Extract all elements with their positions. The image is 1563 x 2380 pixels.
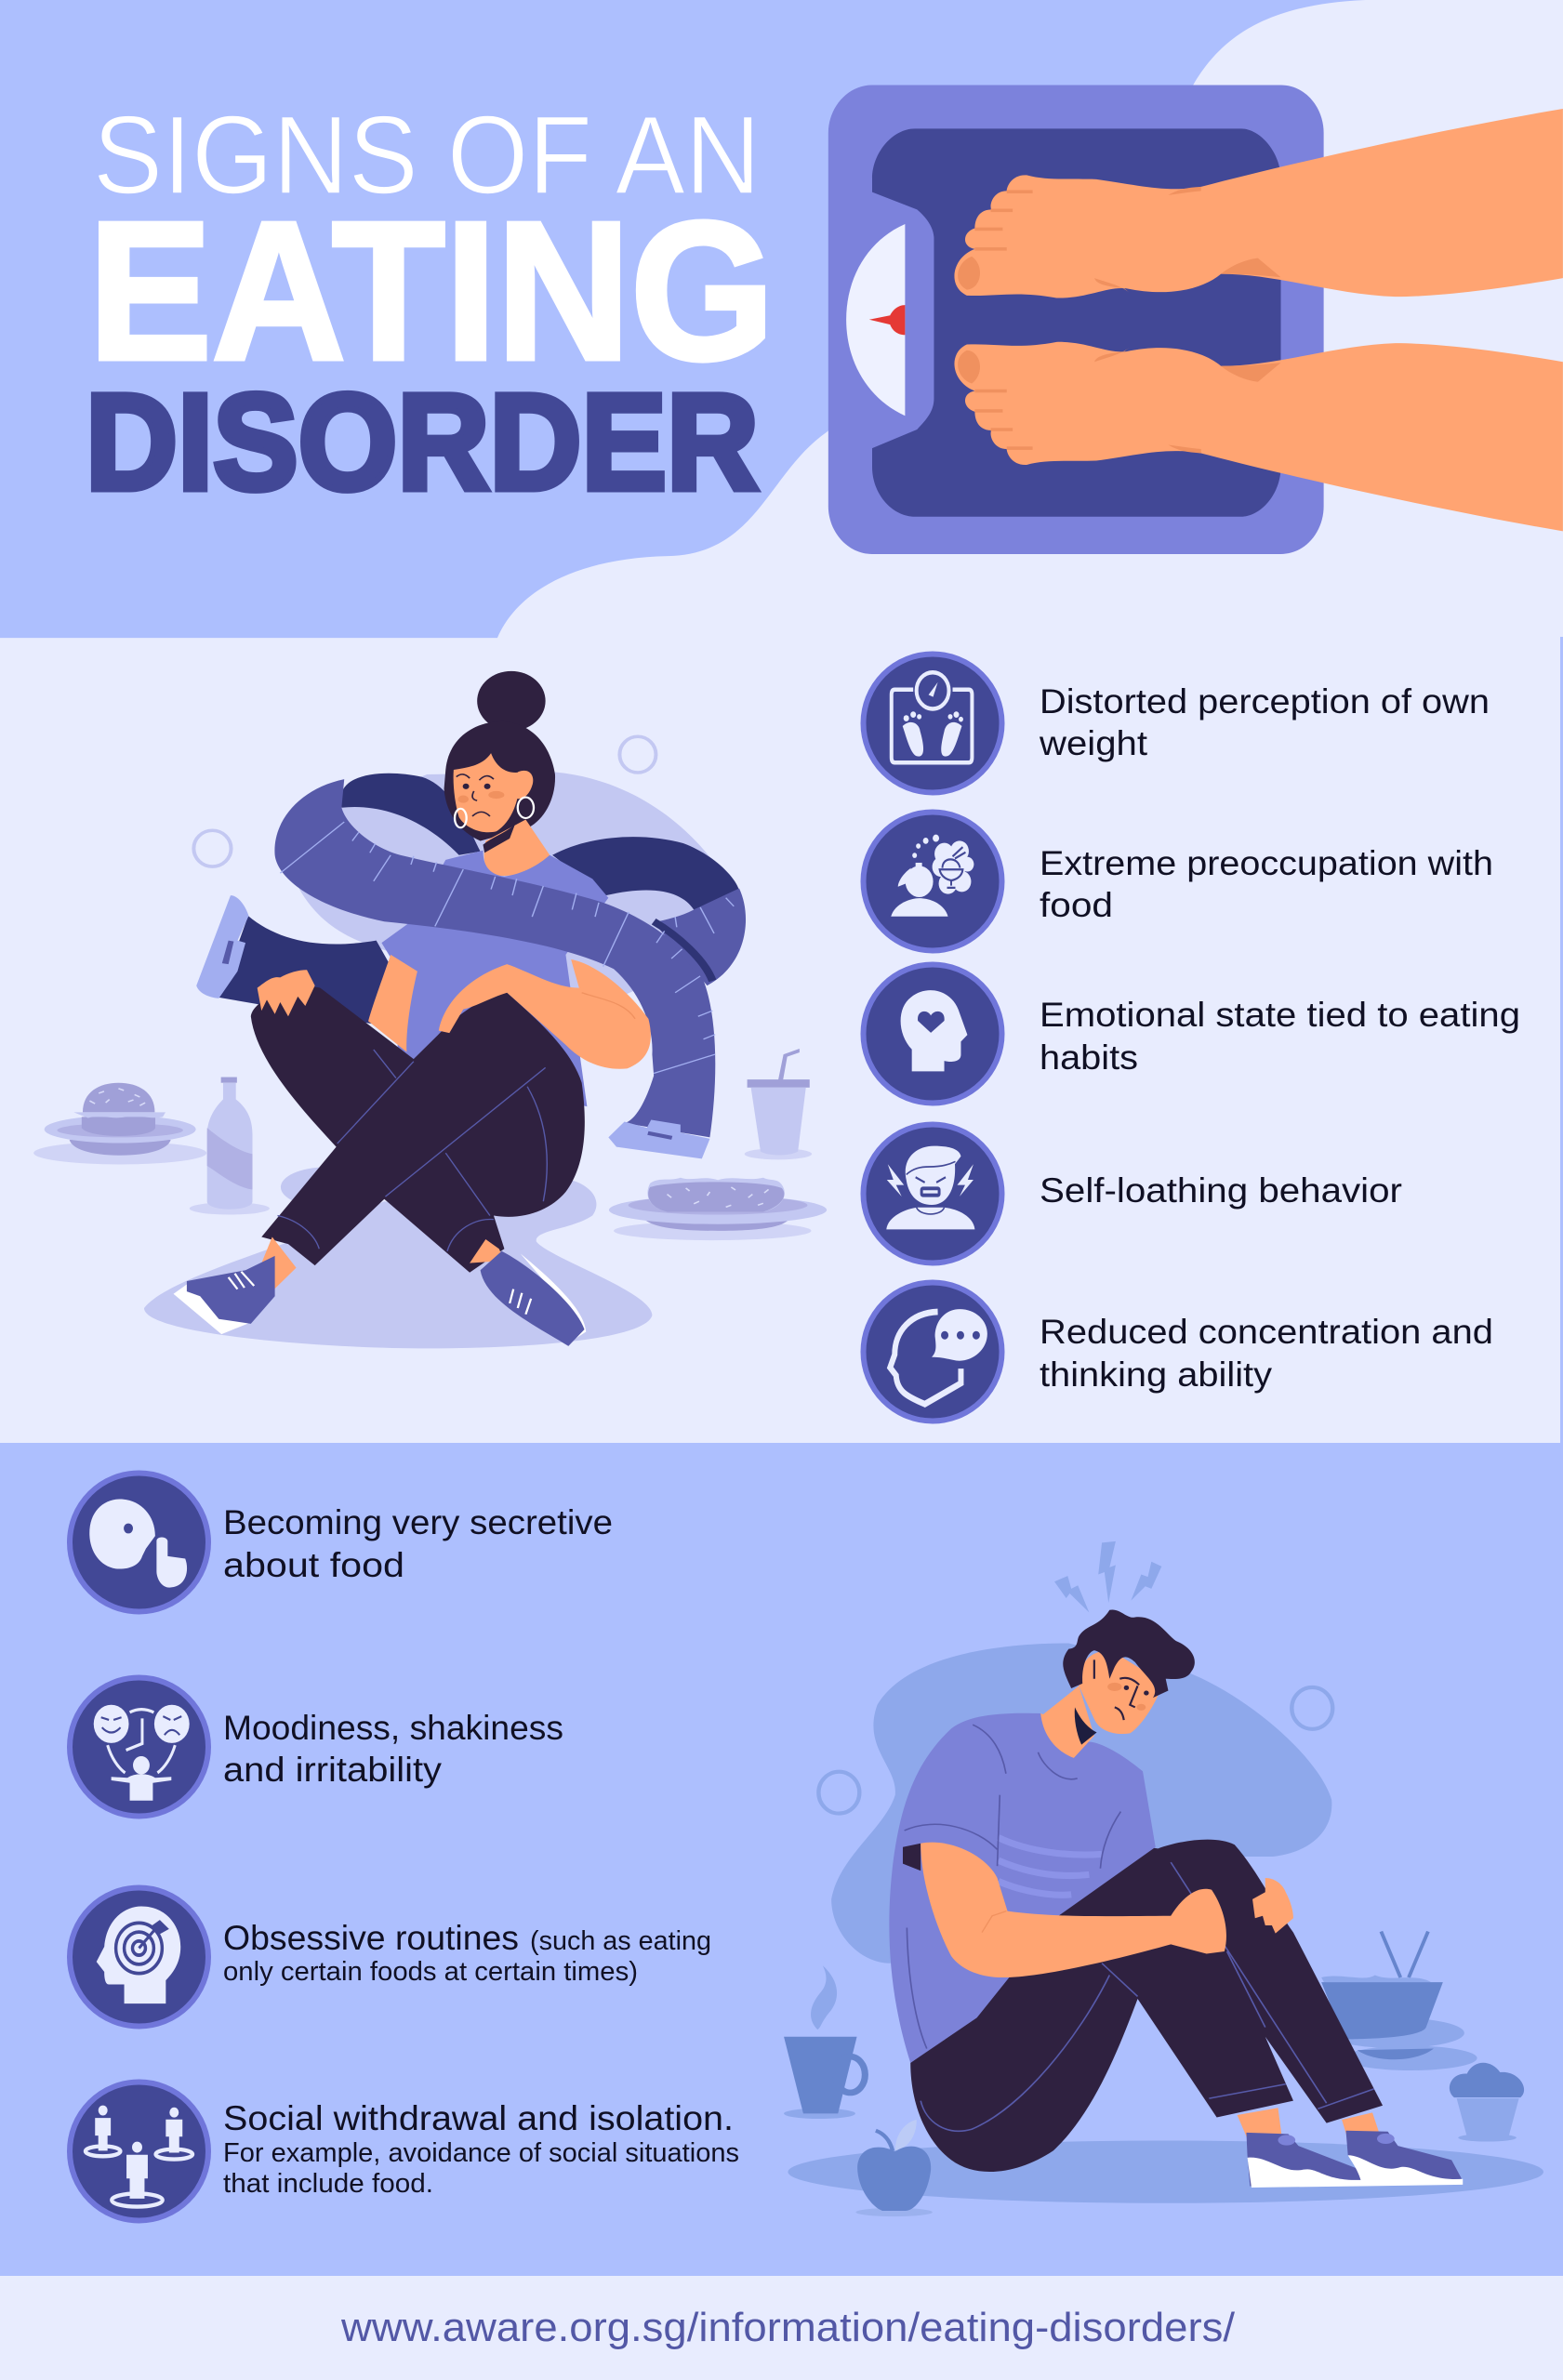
- item: distorted perception of weight: [863, 654, 1490, 792]
- text: moodiness: Moodiness, shakiness: [223, 1709, 563, 1747]
- muffin: [1450, 2063, 1524, 2142]
- floor shadow: [788, 2140, 1543, 2203]
- item: obsessive routines: only certain foods at certain times): [223, 1957, 638, 1987]
- drink cup: [745, 1049, 812, 1159]
- woman shirt: [381, 851, 608, 1106]
- far hand: [1252, 1878, 1293, 1934]
- background blob: [831, 1644, 1331, 1964]
- trouser seams: [277, 1050, 547, 1251]
- text: social withdrawal: Social withdrawal and isolation.: [223, 2099, 734, 2137]
- neck: [1040, 1686, 1094, 1758]
- item: social withdrawal: that include food.: [223, 2169, 433, 2199]
- text: secretive: Becoming very secretive: [223, 1503, 613, 1541]
- woman neck: [484, 820, 550, 876]
- icon: face with finger on lips: [70, 1473, 208, 1612]
- woman face: [454, 753, 534, 832]
- item: self-loathing: [863, 1125, 1402, 1263]
- woman hand on knee: [258, 970, 315, 1016]
- measuring tape front band: [274, 779, 715, 1137]
- icon: angry person: [863, 1125, 1002, 1263]
- top foot: [954, 109, 1563, 298]
- tape metal end: [608, 1119, 709, 1158]
- shirt stripes: [999, 1838, 1102, 1895]
- head: [1063, 1609, 1195, 1734]
- item: emotional state: habits: [1040, 1038, 1138, 1077]
- text: obsessive routines: Obsessive routines: [223, 1919, 519, 1957]
- text: self-loathing: Self-loathing behavior: [1040, 1171, 1402, 1210]
- tape dark loop left: [341, 774, 481, 855]
- woman forearm right: [439, 959, 651, 1069]
- plate of food: [609, 1178, 827, 1240]
- text: emotional state: Emotional state tied to eating: [1040, 996, 1520, 1034]
- item: preoccupation with food: [863, 813, 1493, 950]
- signs list: upper right: [863, 654, 1520, 1421]
- lower section background: [0, 1443, 1563, 2276]
- scale body: [828, 86, 1324, 554]
- item: social withdrawal: [70, 2082, 739, 2220]
- item: moodiness: [70, 1677, 563, 1817]
- trouser seams: [921, 1862, 1374, 2131]
- woman arm left: [368, 955, 417, 1052]
- stress bolts: [1054, 1541, 1161, 1612]
- tape tick marks: [280, 822, 734, 1073]
- text: distorted perception: Distorted perception of own: [1040, 682, 1490, 721]
- icon: scale with footprints: [863, 654, 1002, 792]
- woman left shoe: [174, 1256, 275, 1334]
- shoes: [1246, 2131, 1463, 2188]
- shirt seams: [905, 1725, 1120, 2049]
- bowl and chopsticks: [1321, 1932, 1477, 2070]
- icon: head with speech bubble: [863, 1283, 1002, 1421]
- item: distorted perception of weight: weight: [1039, 724, 1148, 762]
- icon: person with moods: [70, 1677, 208, 1817]
- scale dial: [846, 224, 905, 416]
- floor shadow: [144, 1178, 652, 1348]
- icon: head with heart: [863, 965, 1002, 1103]
- text: preoccupation: Extreme preoccupation with: [1040, 844, 1493, 882]
- title line: signs of an: SIGNS OF AN: [93, 93, 761, 218]
- top foot shading: [958, 187, 1281, 293]
- icon: person thinking of ice cream: [863, 813, 1002, 950]
- item: obsessive routines: [70, 1887, 711, 2027]
- woman right shoe: [481, 1251, 586, 1346]
- bottle: [190, 1078, 270, 1215]
- item: secretive about food: about food: [223, 1546, 404, 1584]
- woman ankles: [261, 1237, 504, 1294]
- shirt: [889, 1713, 1156, 2063]
- item: secretive about food: [70, 1473, 613, 1612]
- illustration: feet on bathroom scale: [828, 86, 1563, 554]
- scale needle: [869, 305, 905, 335]
- trousers: [910, 1840, 1383, 2172]
- background blob: [298, 773, 726, 1012]
- scale platform: [872, 128, 1281, 517]
- arm: [921, 1843, 1226, 1977]
- item: social withdrawal: For example, avoidance of social situations: [223, 2138, 739, 2168]
- item: moodiness: and irritability: [223, 1751, 443, 1789]
- header background wave: [0, 0, 1366, 638]
- tape dark loop right: [552, 837, 739, 909]
- woman trousers: [251, 987, 585, 1273]
- icon: isolated people: [70, 2082, 208, 2220]
- item: reduced concentration: [863, 1283, 1493, 1421]
- item: preoccupation with food: food: [1040, 886, 1113, 924]
- burger on plate: [33, 1083, 206, 1164]
- bottom foot: [954, 342, 1563, 531]
- hair: [1063, 1609, 1195, 1698]
- title line: disorder: DISORDER: [86, 366, 759, 519]
- item: obsessive routines: (such as eating: [530, 1926, 711, 1956]
- tape end left: [196, 895, 390, 1025]
- woman hair: [444, 721, 555, 840]
- apple: [855, 2120, 933, 2216]
- icon: head with target: [70, 1887, 208, 2027]
- title line: eating: EATING: [88, 180, 775, 401]
- decorative rings: [818, 1687, 1332, 1814]
- item: reduced concentration: thinking ability: [1040, 1355, 1273, 1394]
- title: [86, 93, 775, 519]
- signs list: lower left: [70, 1473, 739, 2220]
- ankles: [1238, 2108, 1381, 2138]
- illustration: sad man hugging knees: [784, 1541, 1543, 2216]
- text: concentration: Reduced concentration and: [1040, 1313, 1493, 1351]
- item: emotional state: [863, 965, 1520, 1103]
- illustration: woman wrapped in measuring tape: [33, 671, 827, 1348]
- decorative rings: [193, 736, 656, 866]
- woman hair bun: [477, 671, 546, 731]
- footer url: www.aware.org.sg/information/eating-disorders/: [340, 2305, 1236, 2350]
- coffee cup: [784, 1965, 865, 2119]
